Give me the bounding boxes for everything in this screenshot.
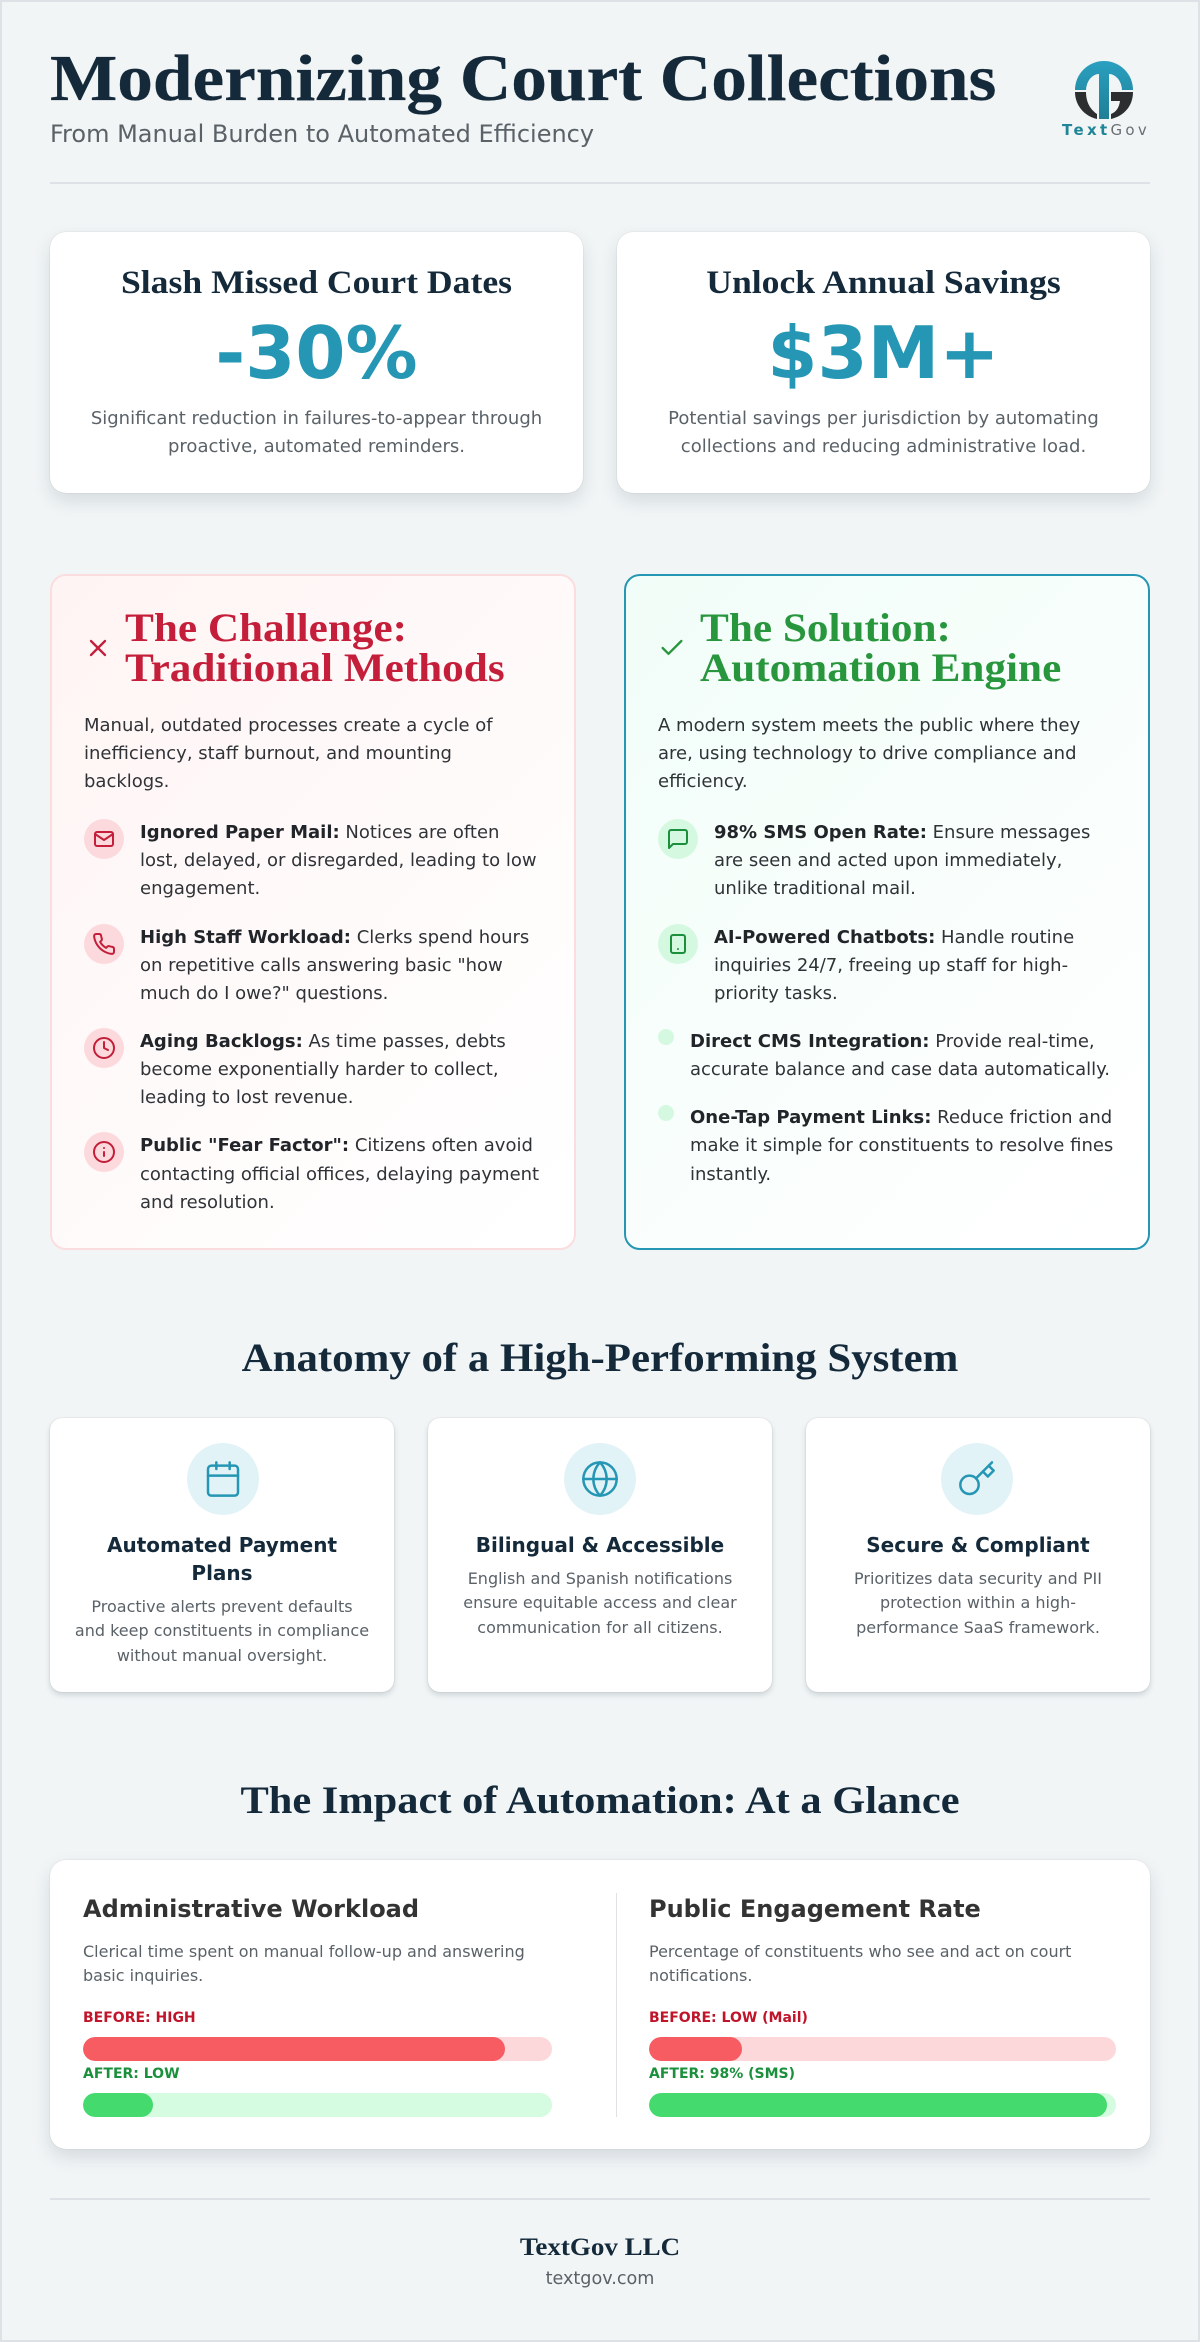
after label: AFTER: 98% (SMS)	[649, 2066, 795, 2082]
section heading: impact: The Impact of Automation: At a Glance	[240, 1778, 960, 1822]
item: high staff workload: much do I owe?" questions.	[140, 983, 388, 1004]
item: public fear factor: and resolution.	[140, 1192, 275, 1213]
item: sms open rate	[658, 819, 1090, 899]
chart description: Clerical time spent on manual follow-up and answering	[83, 1942, 525, 1961]
solution intro: A modern system meets the public where they	[658, 715, 1080, 736]
stat card: missed court dates	[50, 232, 583, 493]
solution heading: Automation Engine	[700, 645, 1061, 690]
challenge list	[84, 819, 539, 1213]
item: sms open rate: are seen and acted upon immediately,	[714, 850, 1062, 871]
stat heading: Slash Missed Court Dates	[121, 265, 512, 301]
feature card: secure	[806, 1418, 1150, 1692]
solution intro: efficiency.	[658, 771, 748, 792]
item: cms integration: accurate balance and case data automatically.	[690, 1059, 1110, 1080]
chart: public engagement rate	[649, 1895, 1116, 2117]
item: public fear factor: Public "Fear Factor": Citizens often avoid	[140, 1135, 533, 1156]
item: ignored paper mail	[84, 819, 537, 899]
challenge intro	[84, 715, 493, 792]
title: Modernizing Court Collections	[50, 42, 996, 115]
item: ai chatbots: priority tasks.	[714, 983, 838, 1004]
item: ignored paper mail: Ignored Paper Mail: Notices are often	[140, 822, 499, 843]
solution list	[658, 819, 1113, 1185]
stat description: Significant reduction in failures-to-appear through	[91, 408, 542, 429]
challenge intro: inefficiency, staff burnout, and mounting	[84, 743, 452, 764]
feature description: Prioritizes data security and PII	[854, 1569, 1102, 1588]
challenge heading: Traditional Methods	[125, 645, 505, 690]
feature description	[463, 1569, 737, 1637]
icon: calendar	[187, 1443, 259, 1515]
challenge heading: The Challenge:	[125, 605, 407, 650]
stat description: proactive, automated reminders.	[168, 436, 465, 456]
stat description	[91, 408, 542, 456]
stat card: annual savings	[617, 232, 1150, 493]
feature card: bilingual	[428, 1418, 772, 1692]
chart title: Public Engagement Rate	[649, 1895, 981, 1923]
feature description	[75, 1597, 369, 1665]
stat description: collections and reducing administrative load.	[681, 436, 1086, 456]
feature description: communication for all citizens.	[477, 1618, 723, 1637]
chart description: Percentage of constituents who see and act on court	[649, 1942, 1071, 1961]
chart description	[83, 1942, 525, 1985]
challenge intro: Manual, outdated processes create a cycle of	[84, 715, 493, 736]
chart description	[649, 1942, 1071, 1985]
feature description: performance SaaS framework.	[856, 1618, 1100, 1637]
panel: impact comparison	[50, 1860, 1150, 2149]
chart: administrative workload	[83, 1895, 552, 2117]
icon: key	[941, 1443, 1013, 1515]
header divider	[50, 182, 1150, 184]
feature description: English and Spanish notifications	[468, 1569, 732, 1588]
item: cms integration	[658, 1029, 1110, 1080]
feature title	[107, 1533, 337, 1585]
item: public fear factor	[84, 1132, 539, 1213]
solution intro: are, using technology to drive compliance and	[658, 743, 1076, 764]
stat description: Potential savings per jurisdiction by automating	[668, 408, 1099, 429]
chart description: basic inquiries.	[83, 1966, 203, 1985]
feature description: without manual oversight.	[117, 1646, 327, 1665]
logo: TextGov	[1062, 61, 1150, 139]
before bar	[649, 2037, 1116, 2061]
item: aging backlogs	[84, 1028, 506, 1108]
feature card: payment plans	[50, 1418, 394, 1692]
feature title: Bilingual & Accessible	[476, 1533, 724, 1557]
item: ai chatbots: AI-Powered Chatbots: Handle routine	[714, 927, 1074, 948]
feature title: Automated Payment	[107, 1533, 337, 1557]
item: high staff workload: on repetitive calls answering basic "how	[140, 955, 503, 976]
item: ai chatbots	[658, 924, 1074, 1004]
footer divider	[50, 2198, 1150, 2200]
stat value: -30%	[215, 311, 418, 395]
footer company name: TextGov LLC	[520, 2234, 680, 2261]
feature description	[854, 1569, 1102, 1637]
item: public fear factor: contacting official offices, delaying payment	[140, 1164, 539, 1185]
item: sms open rate: unlike traditional mail.	[714, 878, 916, 899]
logo: TextGov: TextGov	[1062, 121, 1150, 139]
feature description: Proactive alerts prevent defaults	[91, 1597, 353, 1616]
challenge heading	[90, 605, 505, 690]
item: ignored paper mail: lost, delayed, or disregarded, leading to low	[140, 850, 537, 871]
solution intro	[658, 715, 1080, 792]
before bar	[83, 2037, 552, 2061]
panel: the challenge	[50, 574, 576, 1250]
item: ignored paper mail: engagement.	[140, 878, 260, 899]
item: cms integration: Direct CMS Integration: Provide real-time,	[690, 1031, 1095, 1052]
feature description: ensure equitable access and clear	[463, 1593, 737, 1612]
item: high staff workload: High Staff Workload: Clerks spend hours	[140, 927, 529, 948]
feature description: protection within a high-	[880, 1593, 1076, 1612]
chart title: Administrative Workload	[83, 1895, 419, 1923]
stat description	[668, 408, 1099, 456]
item: aging backlogs: become exponentially harder to collect,	[140, 1059, 499, 1080]
subtitle: From Manual Burden to Automated Efficiency	[50, 120, 594, 148]
solution heading: The Solution:	[700, 605, 951, 650]
item: aging backlogs: leading to lost revenue.	[140, 1087, 353, 1108]
feature description: and keep constituents in compliance	[75, 1621, 369, 1640]
column divider	[616, 1893, 617, 2117]
feature title: Secure & Compliant	[866, 1533, 1090, 1557]
item: payment links	[658, 1105, 1113, 1185]
item: ai chatbots: inquiries 24/7, freeing up staff for high-	[714, 955, 1068, 976]
item: sms open rate: 98% SMS Open Rate: Ensure messages	[714, 822, 1090, 843]
after bar	[83, 2093, 552, 2117]
chart description: notifications.	[649, 1966, 752, 1985]
after label: AFTER: LOW	[83, 2066, 180, 2082]
before label: BEFORE: HIGH	[83, 2010, 196, 2026]
solution heading	[662, 605, 1061, 690]
stat heading: Unlock Annual Savings	[706, 265, 1061, 301]
after bar	[649, 2093, 1116, 2117]
before label: BEFORE: LOW (Mail)	[649, 2010, 808, 2026]
item: payment links: make it simple for constituents to resolve fines	[690, 1135, 1113, 1156]
item: payment links: One-Tap Payment Links: Reduce friction and	[690, 1107, 1112, 1128]
stat value: $3M+	[767, 311, 1000, 395]
item: high staff workload	[84, 924, 529, 1004]
panel: the solution	[624, 574, 1150, 1250]
challenge intro: backlogs.	[84, 771, 169, 792]
icon: globe	[564, 1443, 636, 1515]
item: payment links: instantly.	[690, 1164, 771, 1185]
footer url: textgov.com	[546, 2269, 654, 2289]
section heading: anatomy: Anatomy of a High-Performing System	[242, 1336, 958, 1380]
item: aging backlogs: Aging Backlogs: As time passes, debts	[140, 1031, 506, 1052]
feature title: Plans	[191, 1561, 253, 1585]
